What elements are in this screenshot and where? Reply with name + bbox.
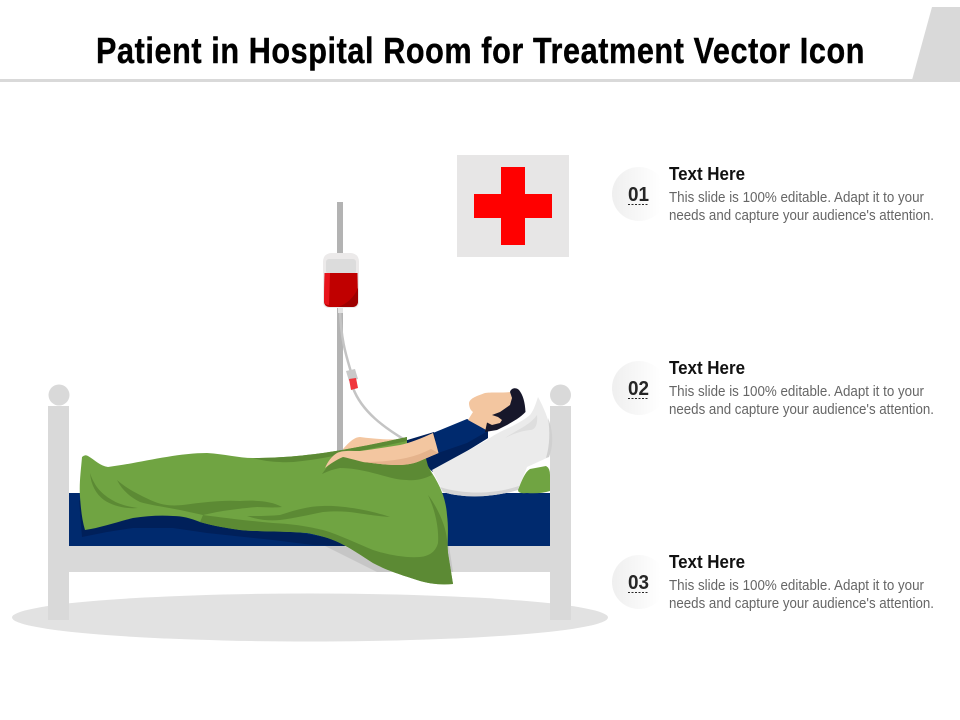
small green pillow [518, 466, 550, 493]
lower blanket band [200, 495, 453, 584]
item 01: needs and capture your audience's attention. [669, 208, 934, 224]
item 02: 02 [628, 378, 649, 400]
header band [0, 7, 960, 82]
item 03: This slide is 100% editable. Adapt it to your [669, 578, 924, 594]
item 03: 03 [628, 572, 649, 594]
item 03: needs and capture your audience's attention. [669, 596, 934, 612]
item 02 [612, 358, 934, 418]
item 03: Text Here [669, 552, 745, 572]
item 03 [612, 552, 934, 612]
item 01: This slide is 100% editable. Adapt it to your [669, 190, 924, 206]
near arm and hand [325, 433, 438, 468]
top edge fold [253, 437, 407, 462]
IV stand with blood bag [323, 202, 405, 452]
item 01: 01 [628, 184, 649, 206]
item 01: Text Here [669, 164, 745, 184]
green blanket [80, 437, 453, 584]
bed [48, 384, 571, 620]
blanket folds [90, 437, 453, 584]
patient body [343, 419, 488, 472]
tube [340, 310, 405, 440]
hair [485, 388, 526, 432]
blood bag [323, 253, 359, 313]
item 01 [612, 164, 934, 224]
patient head [468, 388, 526, 432]
drip chamber [346, 369, 358, 390]
item 02: This slide is 100% editable. Adapt it to your [669, 384, 924, 400]
far arm [343, 437, 408, 453]
pillow [432, 397, 552, 496]
neck and face [468, 392, 514, 431]
fold beneath the arm [322, 450, 432, 480]
floor shadow [12, 594, 608, 642]
icon: red cross sign [457, 155, 569, 257]
shirt [420, 419, 488, 472]
item 02: needs and capture your audience's attention. [669, 402, 934, 418]
item 02: Text Here [669, 358, 745, 378]
blanket shadow on mattress [79, 500, 345, 546]
